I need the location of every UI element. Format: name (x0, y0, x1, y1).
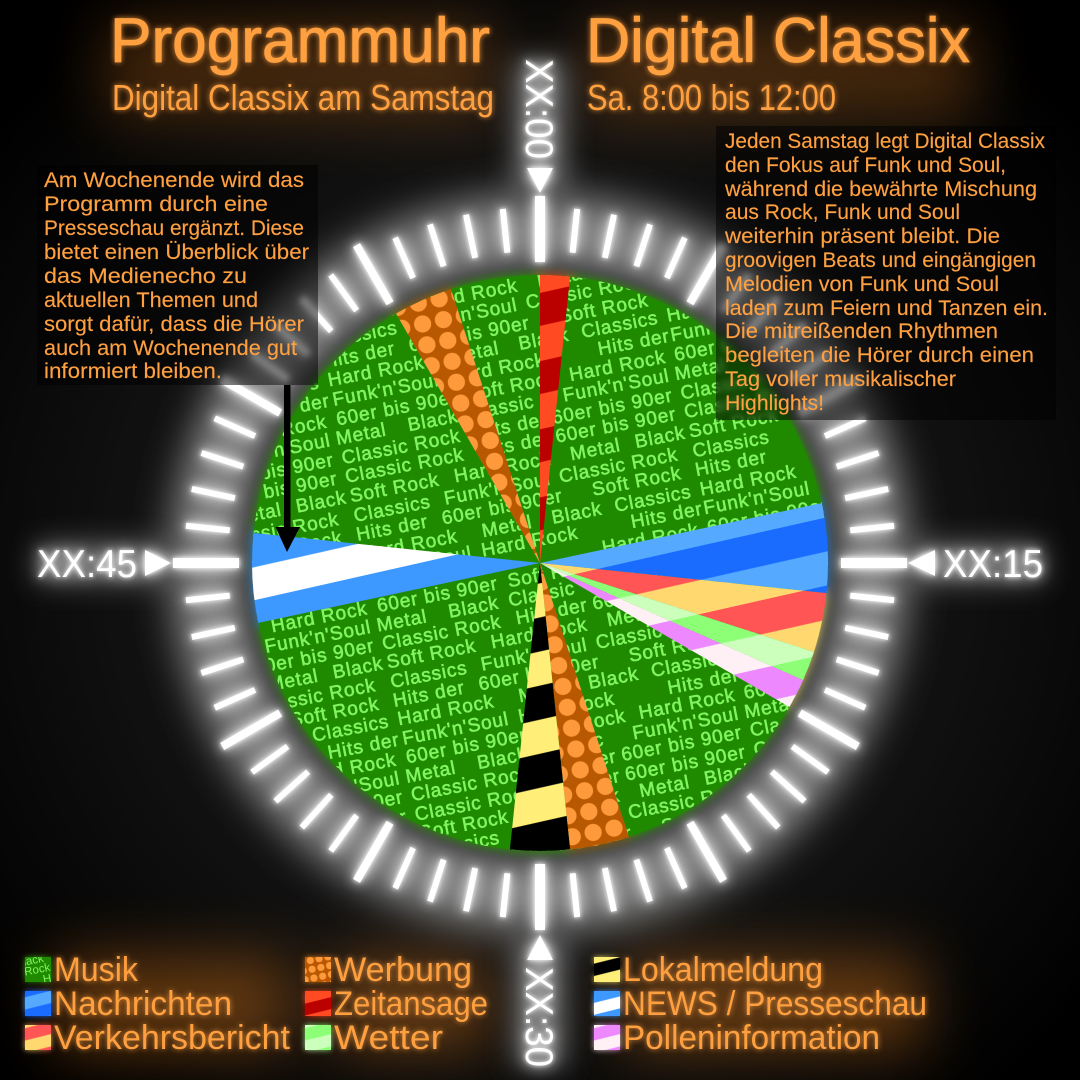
lower music text block: Funk'n'Soul (479, 635, 589, 676)
lower music text block: Hard Rock (522, 785, 622, 824)
lower music text block: Hard Rock (489, 614, 589, 653)
upper music text block: Classics (241, 372, 321, 408)
wedge: Werbung oben (396, 289, 540, 563)
callout: Wochenende Presseschau: Presseschau ergänzt. Diese (44, 216, 304, 240)
lower music text block: Black (670, 589, 724, 619)
callout: Wochenende Presseschau: sorgt dafür, dass die Hörer (44, 312, 304, 336)
lower music text block: Black (331, 653, 385, 684)
upper music text block: Soft Rock (687, 405, 780, 443)
callout: Wochenende Presseschau: Am Wochenende wird das (44, 168, 304, 192)
upper music text block: Black (600, 250, 654, 280)
lower music text block: Classic Rock (409, 763, 532, 806)
callout: Funk und Soul: Die mitreißenden Rhythmen (725, 319, 998, 343)
upper music text block: Hard Rock (600, 520, 700, 559)
upper music text block: Funk'n'Soul (409, 295, 519, 336)
upper music text block: Soft Rock (348, 470, 441, 507)
upper music text block: Hits der (355, 511, 430, 546)
minute ticks (186, 209, 894, 917)
upper music text block: 60er bis 90er (550, 385, 675, 429)
lower music text block: Black (586, 664, 640, 694)
lower music text block: Metal (266, 666, 320, 696)
lower music text block: 60er bis 90er (281, 787, 405, 831)
lower music text block: Classics (649, 647, 730, 682)
legend item: Werbung: Werbung (334, 951, 472, 989)
callout: Wochenende Presseschau: informiert bleiben. (44, 359, 222, 383)
lower music text block: Hard Rock (517, 689, 617, 728)
callout: Funk und Soul: groovigen Beats und eingängigen (725, 248, 1036, 272)
upper music text block: Funk'n'Soul (364, 543, 474, 584)
subtitle left: Digital Classix am Samstag (112, 77, 494, 118)
upper music text block: Black (261, 314, 315, 345)
lower music text block: 60er bis 90er (375, 573, 500, 617)
upper music text block: Classic Rock (524, 271, 647, 314)
upper music text block: 60er bis 90er (407, 313, 531, 357)
callout: Funk und Soul: während die bewährte Mischung (724, 177, 1037, 201)
lower music text block: Classic Rock (594, 611, 717, 654)
legend item: Musik: H (42, 973, 53, 986)
callout: Funk und Soul: Melodien von Funk und Soul (725, 272, 999, 296)
callout: Wochenende Presseschau: aktuellen Themen und (44, 288, 258, 312)
lower music text block: 60er bis 90er (623, 742, 748, 786)
upper music text block: Classic Rock (557, 444, 680, 488)
upper music text block: Hits der (596, 326, 671, 360)
callout: Funk und Soul: aus Rock, Funk und Soul (725, 200, 960, 224)
upper music text block: Metal (196, 327, 250, 357)
upper music text block: 60er bis 90er (211, 450, 336, 494)
upper music text block: 60er bis 90er (215, 469, 339, 512)
lower music text block: 60er bis 90er (509, 823, 634, 866)
title: Digital Classix: Digital Classix (586, 6, 970, 76)
lower music text block: Classic Rock (748, 698, 871, 741)
upper music text block: Classic (466, 391, 536, 425)
lower music text block: Hard Rock (298, 750, 398, 789)
upper music text block: Classic Rock (679, 361, 801, 404)
upper music text block (253, 275, 824, 557)
pie chart (252, 275, 828, 851)
arrow: callout to NEWS wedge (276, 385, 300, 552)
upper music text block: Classics (274, 546, 354, 581)
upper music text block: Funk'n'Soul (561, 366, 671, 407)
upper music text block: Hard Rock (480, 523, 580, 562)
glow: tick ring haze (208, 231, 872, 895)
legend item: NEWS / Presseschau: NEWS / Presseschau (623, 985, 927, 1023)
lower music text block: Funk'n'Soul (631, 704, 741, 744)
upper music text block: Hard Rock (326, 352, 426, 391)
lower music text block: 60er bis 90er (252, 636, 376, 679)
lower music text block (264, 557, 828, 851)
lower music text block: Metal (605, 601, 659, 631)
label XX:15: XX:15 (943, 543, 1043, 586)
lower music text block: Hits der (730, 613, 806, 647)
callout: Funk und Soul: den Fokus auf Funk und Soul, (725, 153, 1006, 177)
wedge: Polleninformation (540, 563, 803, 707)
label XX:30: XX:30 (517, 967, 560, 1067)
upper music text block: Hard Rock (698, 462, 798, 501)
lower music text block: Metal (638, 772, 692, 802)
callout: Wochenende Presseschau: das Medienecho zu (44, 264, 247, 288)
upper music text block: Hits der (661, 274, 736, 308)
upper music text block: Soft Rock (251, 528, 344, 565)
lower music text block: Funk'n'Soul (512, 805, 622, 846)
lower music text block: Hits der (514, 595, 589, 629)
lower music text block: Metal (517, 677, 571, 707)
lower music text block: Metal (743, 693, 797, 723)
lower music text block: 60er bis 90er (591, 571, 715, 615)
legend item: Musik: Rock (23, 962, 52, 979)
upper music text block: Soft Rock (557, 290, 650, 328)
upper music text block: Black (550, 499, 604, 529)
quarter-hour ticks (173, 196, 907, 930)
upper music text block: Metal (334, 420, 388, 450)
legend item: Nachrichten: Nachrichten (54, 985, 232, 1023)
upper music text block: Hard Rock (447, 350, 547, 389)
lower music text block: Soft Rock (288, 694, 381, 731)
pie glow (251, 274, 829, 852)
upper music text block: Hard Rock (665, 288, 765, 327)
callout: Wochenende Presseschau: Programm durch eine (44, 192, 268, 216)
glow: orange haze behind title (105, 20, 975, 120)
lower music text block: 60er bis 90er (477, 652, 601, 695)
lower music text block: 60er bis 90er (620, 722, 744, 766)
label XX:45: XX:45 (37, 543, 137, 586)
upper music text block: Metal (535, 262, 589, 292)
legend (21, 951, 927, 1057)
lower music text block: Metal (714, 542, 768, 572)
upper music text block: Black (745, 341, 799, 371)
upper music text block: Soft Rock (465, 368, 558, 405)
upper music text block: 60er bis 90er (335, 387, 459, 430)
upper music text block: Metal (673, 355, 727, 385)
lower music text block: Funk'n'Soul (263, 617, 373, 658)
upper music text block: Classics (658, 253, 738, 288)
legend item: Musik: Musik (54, 951, 139, 989)
callout: Funk und Soul: weiterhin präsent bleibt. Die (724, 224, 1000, 248)
legend item: Wetter: Wetter (334, 1019, 443, 1057)
upper music text block: Black (294, 487, 348, 518)
upper music text block: Classics (352, 492, 433, 527)
clock ticks (173, 196, 907, 930)
legend item: Polleninformation: Polleninformation (623, 1019, 880, 1057)
callout: Funk und Soul: Jeden Samstag legt Digital Classix (725, 129, 1045, 153)
lower music text block: Classics (728, 593, 808, 628)
five-minute ticks (222, 245, 858, 881)
upper music text block: Classic Rock (344, 445, 466, 488)
callout: Wochenende Presseschau (37, 165, 318, 385)
lower music text block: Hits der (543, 746, 618, 781)
upper music text block: Classics (691, 427, 771, 462)
lower music text block: Classic Rock (381, 612, 503, 655)
lower music text block: Black (447, 593, 501, 623)
lower music text block: Metal (299, 837, 353, 867)
legend item: Musik: lack (22, 953, 45, 969)
upper music text block: Soft Rock (218, 355, 311, 392)
upper music text block: Hard Rock (359, 526, 459, 565)
upper music text block: Classics (580, 308, 660, 343)
wedge: Lokalmeldung (510, 563, 570, 851)
lower music text block: Classic Rock (288, 845, 410, 888)
lower music text block: Classic Rock (719, 547, 842, 590)
wedge: Musik (252, 275, 828, 851)
upper music text block: Hits der (474, 409, 549, 444)
wedge: Verkehrsbericht (540, 563, 826, 652)
lower music text block: Hits der (326, 730, 401, 764)
lower music text block: Black (364, 824, 418, 854)
glow: orange haze behind legend (54, 957, 923, 1050)
lower music text block: Soft Rock (724, 571, 817, 609)
legend item: Lokalmeldung: Lokalmeldung (623, 951, 823, 989)
upper music text block: 60er bis 90er (440, 486, 564, 529)
lower music text block: 60er bis 90er (742, 660, 866, 704)
lower music text block: Funk'n'Soul (401, 709, 511, 750)
upper music text block: Metal (480, 512, 534, 542)
upper music text block: Hits der (629, 499, 704, 533)
upper music text block: Classic Rock (185, 335, 308, 378)
lower music text block: Classics (310, 711, 391, 747)
callout: Wochenende Presseschau: bietet einen Überblick über (44, 240, 309, 264)
upper music text block: Funk'n'Soul (669, 305, 779, 346)
lower music text block: Classic Rock (752, 718, 874, 761)
upper music text block: Black (406, 406, 460, 436)
wedge: NEWS / Presseschau (252, 533, 540, 623)
upper music text block: 60er bis 90er (673, 322, 797, 366)
lower music text block: Funk'n'Soul (739, 644, 849, 685)
lower music text block: Hits der (391, 678, 467, 712)
lower music text block: Hits der (547, 766, 622, 800)
lower music text block: Hard Rock (637, 685, 737, 724)
upper music text block: Funk'n'Soul (331, 370, 441, 411)
lower music text block: Hits der (424, 848, 499, 883)
lower music text block: Hard Rock (396, 691, 496, 730)
upper music text block: Hits der (289, 564, 365, 598)
legend item: Zeitansage: Zeitansage (334, 985, 488, 1023)
lower music text block: Classic Rock (627, 780, 749, 824)
upper music text block: Hard Rock (419, 275, 519, 314)
lower music text block: Soft Rock (385, 636, 478, 673)
wedge: Werbung unten (540, 563, 629, 849)
upper music text block: Metal (229, 500, 283, 530)
upper music text block: Hard Rock (452, 448, 552, 487)
lower music text block: Hard Rock (735, 627, 835, 666)
title: Programmuhr: Programmuhr (110, 6, 490, 76)
lower music text block: 60er bis 90er (284, 807, 409, 850)
callout: Funk und Soul: laden zum Feiern und Tanzen ein. (725, 296, 1048, 320)
lower music text block: Metal (375, 606, 429, 636)
lower music text block: Soft Rock (506, 555, 599, 592)
lower music text block: Classic Rock (413, 782, 536, 826)
callout: Wochenende Presseschau: auch am Wochenende gut (44, 336, 297, 360)
lower music text block: Classics (389, 658, 469, 693)
upper music text block: Soft Rock (315, 297, 408, 334)
upper music text block: Hard Rock (229, 412, 329, 451)
upper music text block: Black (517, 325, 571, 355)
lower music text block: Metal (404, 758, 458, 788)
upper music text block: Black (633, 423, 687, 453)
upper music text block: Classic Rock (218, 509, 341, 552)
lower music text block: Black (703, 760, 757, 790)
lower music text block: Classics (421, 828, 502, 863)
callout: Funk und Soul: Highlights! (725, 391, 824, 415)
upper music text block: Classics (319, 318, 399, 353)
upper music text block: Hits der (256, 391, 332, 425)
upper music text block: Metal (568, 435, 622, 465)
lower music text block: Hits der (666, 665, 741, 699)
callout: Funk und Soul (716, 126, 1056, 420)
lower music text block: Soft Rock (535, 706, 628, 743)
upper music text block: 60er bis 90er (554, 404, 678, 448)
lower music text block: Classic Rock (255, 675, 378, 718)
wedge: Wetter (540, 563, 814, 680)
upper music text block: Hits der (322, 339, 397, 373)
lower music text block: Funk'n'Soul (602, 552, 712, 593)
upper music text block: Soft Rock (590, 463, 683, 501)
lower music text block: Funk'n'Soul (292, 768, 402, 809)
lower music text block: Classic (535, 729, 606, 763)
lower music text block: Hard Rock (269, 598, 369, 637)
wedge: Nachrichten (540, 503, 828, 593)
callout: Funk und Soul: begleiten die Hörer durch einen (725, 343, 1034, 367)
lower music text block: 60er bis 90er (404, 725, 529, 768)
subtitle right: Sa. 8:00 bis 12:00 (587, 77, 836, 118)
upper music text block: Hits der (477, 428, 552, 462)
lower music text block: Soft Rock (418, 807, 510, 844)
upper music text block: Metal (447, 338, 501, 368)
callout: Funk und Soul: Tag voller musikalischer (725, 367, 956, 391)
upper music text block: 60er bis 90er (706, 495, 830, 539)
lower music text block: Soft Rock (660, 800, 753, 838)
upper music text block: Classic Rock (682, 380, 805, 423)
upper music text block: Classic Rock (340, 426, 462, 469)
upper music text block: Hard Rock (567, 347, 668, 386)
upper music text block: Funk'n'Soul (222, 430, 332, 471)
lower music text block: Soft Rock (627, 629, 720, 667)
title block (110, 6, 970, 118)
legend item: Verkehrsbericht: Verkehrsbericht (54, 1019, 291, 1057)
upper music text block: Classics (613, 482, 693, 517)
upper music text block: Funk'n'Soul (702, 478, 812, 519)
legend item: Musik (21, 951, 139, 989)
wedge: Zeitansage (540, 275, 570, 563)
lower music text block: Black (476, 744, 530, 774)
label XX:00: XX:00 (517, 59, 560, 159)
upper music text block: Hits der (693, 447, 769, 481)
lower music text block: Classic (507, 578, 577, 611)
upper music text block: Funk'n'Soul (442, 469, 552, 510)
